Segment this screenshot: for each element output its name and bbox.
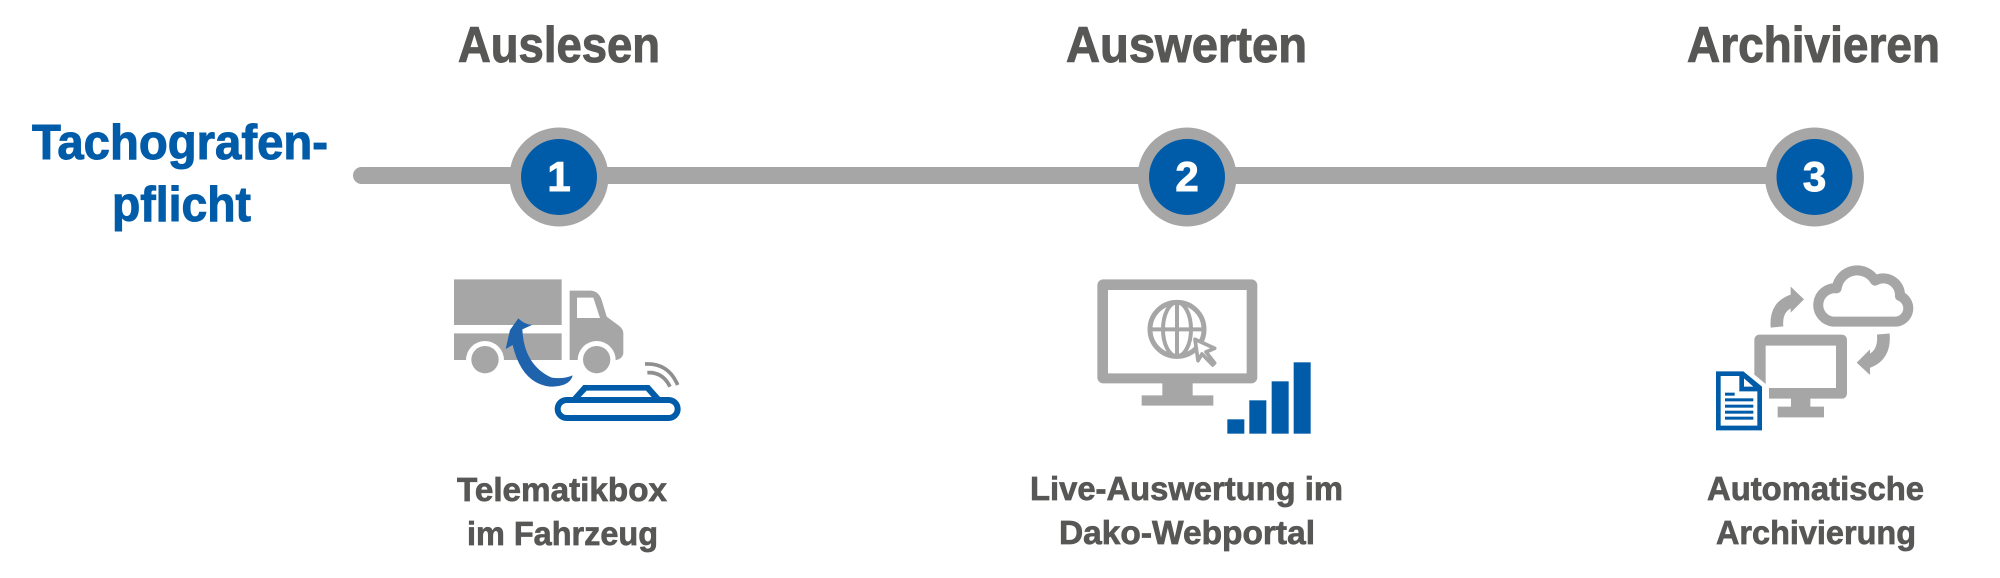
sync arrow up: [1777, 287, 1804, 327]
caption: Live-Auswertung im Dako-Webportal: Dako-Webportal: [1059, 514, 1315, 551]
step marker 1: [510, 128, 608, 226]
heading: Auslesen: Auslesen: [458, 17, 660, 73]
signal bars: [1227, 362, 1311, 434]
telematics box: [555, 385, 681, 421]
heading: Archivieren: Archivieren: [1687, 17, 1940, 73]
caption: Automatische Archivierung: [1707, 470, 1924, 551]
document cutout: [1713, 368, 1769, 437]
caption: Automatische Archivierung: Archivierung: [1716, 514, 1916, 551]
step marker 3: [1765, 128, 1864, 226]
globe: [1150, 302, 1204, 356]
archive monitor: [1754, 335, 1847, 417]
monitor: [1097, 279, 1257, 406]
step marker 3: 3: [1803, 153, 1826, 200]
icon: cloud archive: [1713, 270, 1908, 437]
truck cab: [570, 291, 623, 360]
heading: Auswerten: Auswerten: [1066, 17, 1307, 73]
truck wheels: [466, 341, 616, 373]
caption: Telematikbox im Fahrzeug: im Fahrzeug: [467, 515, 658, 552]
caption: Telematikbox im Fahrzeug: Telematikbox: [457, 471, 668, 508]
cursor: [1195, 339, 1215, 365]
icon: truck and telematics box: [454, 279, 681, 421]
truck window: [577, 298, 600, 318]
sync arrow down: [1857, 334, 1884, 375]
upload arrow: [506, 318, 573, 387]
caption: Telematikbox im Fahrzeug: [457, 471, 668, 552]
title: Tachografenpflicht: Tachografen-: [32, 116, 328, 170]
caption: Live-Auswertung im Dako-Webportal: [1030, 470, 1343, 551]
step marker 1: 1: [547, 153, 571, 200]
document: [1716, 371, 1762, 430]
step marker 2: 2: [1175, 153, 1199, 200]
step marker 2: [1138, 128, 1236, 226]
title: Tachografenpflicht: pflicht: [112, 178, 251, 232]
icon: web portal monitor and bars: [1097, 279, 1311, 434]
title: Tachografenpflicht: [32, 116, 328, 232]
caption: Live-Auswertung im Dako-Webportal: Live-Auswertung im: [1030, 470, 1343, 507]
caption: Automatische Archivierung: Automatische: [1707, 470, 1924, 507]
timeline bar: [353, 167, 1814, 184]
cloud: [1818, 270, 1908, 322]
wireless signal: [645, 364, 678, 387]
truck cargo box: [454, 279, 562, 360]
